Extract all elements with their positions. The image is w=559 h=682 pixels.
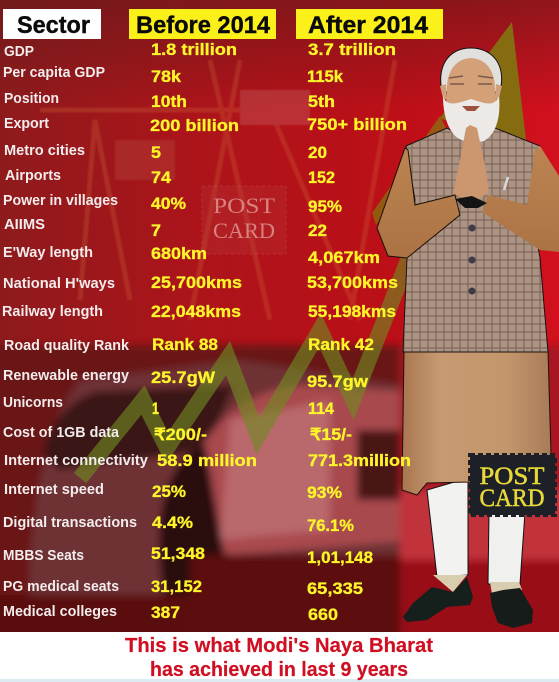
wrist shadow	[455, 196, 487, 208]
row: AIIMS: 22	[308, 222, 327, 240]
row: Railway length	[2, 303, 396, 321]
row: Cost of 1GB data	[3, 424, 352, 444]
ears	[440, 84, 502, 100]
footer caption: has achieved in last 9 years	[150, 658, 408, 681]
row: Digital transactions	[3, 514, 354, 535]
row: Metro cities: 20	[308, 144, 327, 162]
row: Renewable energy	[3, 367, 368, 391]
row: Metro cities	[4, 142, 327, 162]
row: Unicorns	[3, 394, 335, 418]
port cranes backdrop	[40, 60, 395, 320]
row: Renewable energy: 95.7gw	[307, 373, 368, 391]
row: Power in villages: Power in villages	[3, 192, 118, 209]
hair	[441, 48, 502, 92]
row: MBBS Seats: 1,01,148	[307, 549, 373, 567]
row: Internet speed: 25%	[152, 483, 186, 501]
postcard badge: CARD	[480, 485, 544, 512]
postcard badge: POST	[480, 463, 544, 490]
row: Road quality Rank: Rank 88	[152, 336, 218, 354]
row: Cost of 1GB data: Cost of 1GB data	[3, 424, 120, 441]
train backdrop	[0, 345, 559, 640]
left shoe	[403, 577, 473, 622]
row: PG medical seats: PG medical seats	[3, 578, 119, 595]
row: Railway length: 55,198kms	[308, 303, 396, 321]
row: Per capita GDP: Per capita GDP	[3, 64, 105, 81]
row: Power in villages: 40%	[151, 195, 186, 213]
row: Cost of 1GB data: ₹200/-	[154, 426, 207, 444]
row: National H'ways: 53,700kms	[307, 274, 398, 292]
postcard watermark stamp: POST	[213, 193, 276, 218]
beard	[443, 96, 499, 142]
row: MBBS Seats: MBBS Seats	[3, 547, 84, 564]
row: Internet speed: 93%	[307, 484, 342, 502]
row: AIIMS: 7	[151, 222, 161, 240]
row: E'Way length: E'Way length	[3, 244, 93, 261]
row: Export: 750+ billion	[307, 116, 407, 134]
row: Airports: 74	[151, 169, 172, 187]
left leg	[427, 478, 468, 577]
row: Road quality Rank	[4, 336, 374, 354]
row: Airports: 152	[308, 169, 335, 187]
row: E'Way length: 680km	[151, 245, 207, 263]
row: PG medical seats: 65,335	[307, 580, 363, 598]
row: Medical colleges: 660	[308, 606, 338, 624]
row: Unicorns: Unicorns	[3, 394, 63, 411]
footer caption: This is what Modi's Naya Bharat	[125, 634, 433, 657]
row: Airports	[5, 167, 335, 187]
row: Position: Position	[4, 90, 59, 107]
row: Metro cities: Metro cities	[4, 142, 85, 159]
row: Medical colleges: 387	[151, 604, 180, 622]
row: GDP: 3.7 trillion	[308, 41, 396, 59]
column headers: Sector	[17, 12, 90, 39]
row: Medical colleges	[3, 603, 338, 624]
footer caption	[0, 632, 559, 682]
row: Internet connectivity: 58.9 million	[157, 452, 257, 470]
row: Renewable energy: 25.7gW	[151, 369, 215, 387]
postcard watermark stamp: CARD	[213, 218, 275, 243]
row: Internet connectivity	[4, 452, 411, 470]
right leg	[488, 512, 525, 584]
row: PG medical seats	[3, 578, 363, 598]
row: Per capita GDP: 78k	[151, 68, 182, 86]
row: Road quality Rank: Road quality Rank	[4, 337, 130, 354]
checked jacket	[403, 128, 548, 352]
row: Internet connectivity: 771.3million	[308, 452, 411, 470]
column headers: After 2014	[308, 12, 428, 39]
socks	[433, 575, 522, 594]
row: Digital transactions: 4.4%	[152, 514, 193, 532]
postcard badge	[470, 455, 555, 515]
row: Export	[4, 115, 407, 135]
jacket buttons	[468, 228, 476, 291]
row: National H'ways: National H'ways	[3, 275, 115, 292]
row: GDP	[4, 41, 396, 60]
row: Power in villages: 95%	[308, 198, 342, 216]
column headers: Before 2014	[136, 12, 270, 39]
row: AIIMS: AIIMS	[4, 216, 45, 233]
row: MBBS Seats	[3, 545, 373, 567]
row: Cost of 1GB data: ₹15/-	[310, 426, 352, 444]
row: GDP: GDP	[4, 43, 34, 60]
row: National H'ways: 25,700kms	[151, 274, 242, 292]
row: Position: 10th	[151, 93, 187, 111]
kurta	[402, 350, 551, 495]
row: MBBS Seats: 51,348	[151, 545, 205, 563]
face	[446, 58, 497, 120]
row: Internet speed: Internet speed	[4, 481, 104, 498]
row: Per capita GDP: 115k	[307, 68, 344, 86]
row: Unicorns: 1	[152, 400, 159, 418]
row: Digital transactions: Digital transactions	[3, 514, 137, 531]
postcard watermark stamp	[202, 186, 286, 254]
row: PG medical seats: 31,152	[151, 578, 202, 596]
row: Unicorns: 114	[308, 400, 335, 418]
row: Renewable energy: Renewable energy	[3, 367, 130, 384]
right shoe	[490, 588, 533, 628]
column headers	[3, 9, 443, 39]
row: Railway length: Railway length	[2, 303, 103, 320]
row: AIIMS	[4, 216, 327, 240]
row: Internet speed	[4, 481, 342, 502]
mouth	[462, 106, 480, 111]
row: Airports: Airports	[5, 167, 61, 184]
row: Export: 200 billion	[150, 117, 239, 135]
row: National H'ways	[3, 274, 398, 292]
row: Position: 5th	[308, 93, 335, 111]
row: Per capita GDP	[3, 64, 344, 86]
row: E'Way length: 4,067km	[308, 249, 380, 267]
row: GDP: 1.8 trillion	[151, 41, 237, 59]
person in namaste pose	[377, 48, 559, 628]
row: E'Way length	[3, 244, 380, 267]
left sleeve	[377, 148, 460, 258]
green rising arrow	[80, 22, 526, 478]
row: Metro cities: 5	[151, 144, 161, 162]
row: Road quality Rank: Rank 42	[308, 336, 374, 354]
joined hands	[453, 125, 489, 204]
right sleeve	[482, 146, 559, 252]
row: Medical colleges: Medical colleges	[3, 603, 117, 620]
row: Export: Export	[4, 115, 49, 132]
row: Railway length: 22,048kms	[151, 303, 241, 321]
row: Power in villages	[3, 192, 342, 216]
row: Position	[4, 90, 335, 111]
pen in pocket	[504, 177, 508, 190]
glasses and brows	[449, 76, 493, 84]
row: Internet connectivity: Internet connectivity	[4, 452, 149, 469]
data table	[2, 41, 411, 624]
row: Digital transactions: 76.1%	[307, 517, 354, 535]
